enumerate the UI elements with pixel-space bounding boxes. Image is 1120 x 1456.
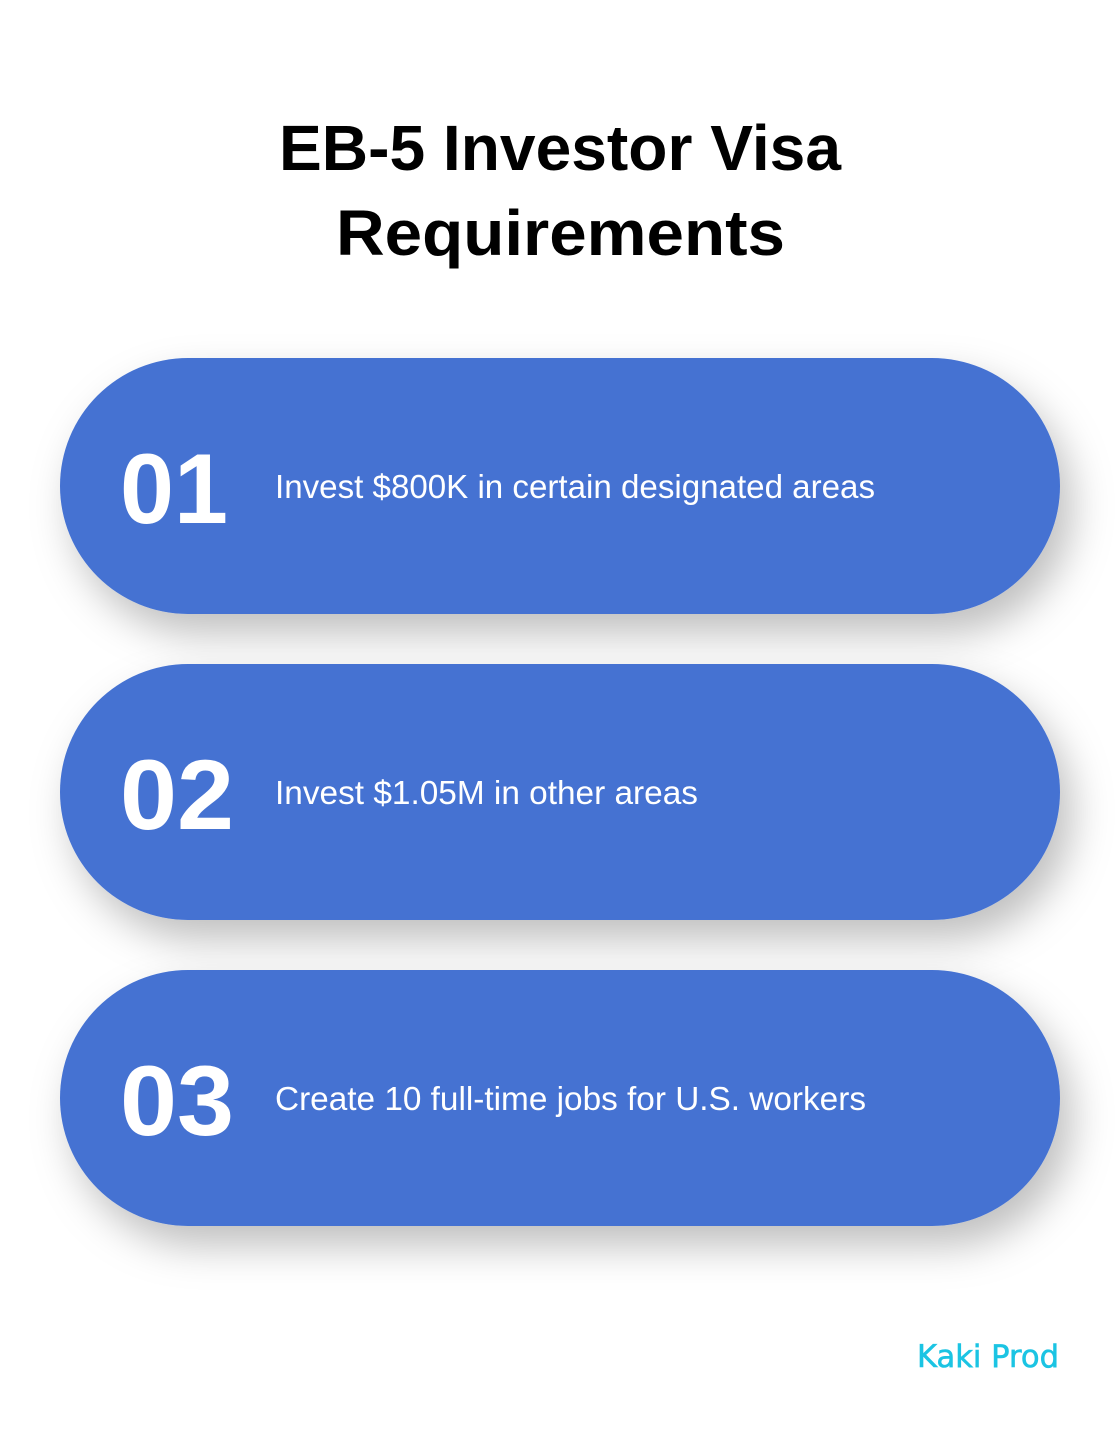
- logo: Kaki Prod: Kaki Prod: [917, 1339, 1059, 1375]
- text: requirement 03: Create 10 full-time jobs for U.S. workers: [275, 1080, 866, 1117]
- panel: requirement 03: [60, 970, 1060, 1226]
- title: Requirements: [336, 197, 785, 269]
- title: EB-5 Investor Visa: [279, 112, 841, 184]
- number 03: 03: [120, 1045, 234, 1156]
- panel: requirement 02: [60, 664, 1060, 920]
- number 02: 02: [120, 739, 234, 850]
- number 01: 01: [120, 433, 228, 544]
- title: [279, 112, 841, 269]
- text: requirement 02: Invest $1.05M in other areas: [275, 774, 698, 811]
- text: requirement 01: Invest $800K in certain designated areas: [275, 468, 875, 505]
- panel: requirement 01: [60, 358, 1060, 614]
